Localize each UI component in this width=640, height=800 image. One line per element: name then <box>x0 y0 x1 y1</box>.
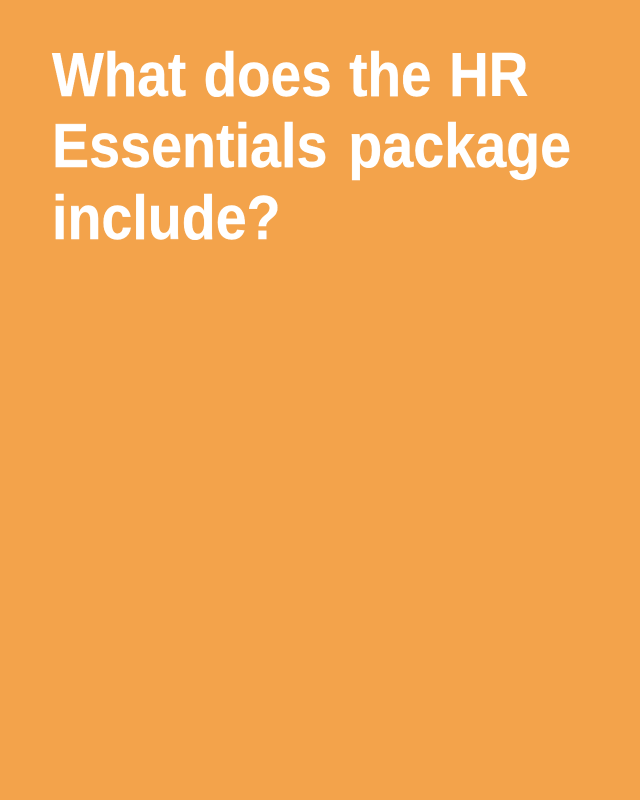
title: What does the HR <box>52 41 528 110</box>
title <box>52 41 571 253</box>
title: Essentials package <box>52 112 571 181</box>
title: include? <box>52 184 281 253</box>
